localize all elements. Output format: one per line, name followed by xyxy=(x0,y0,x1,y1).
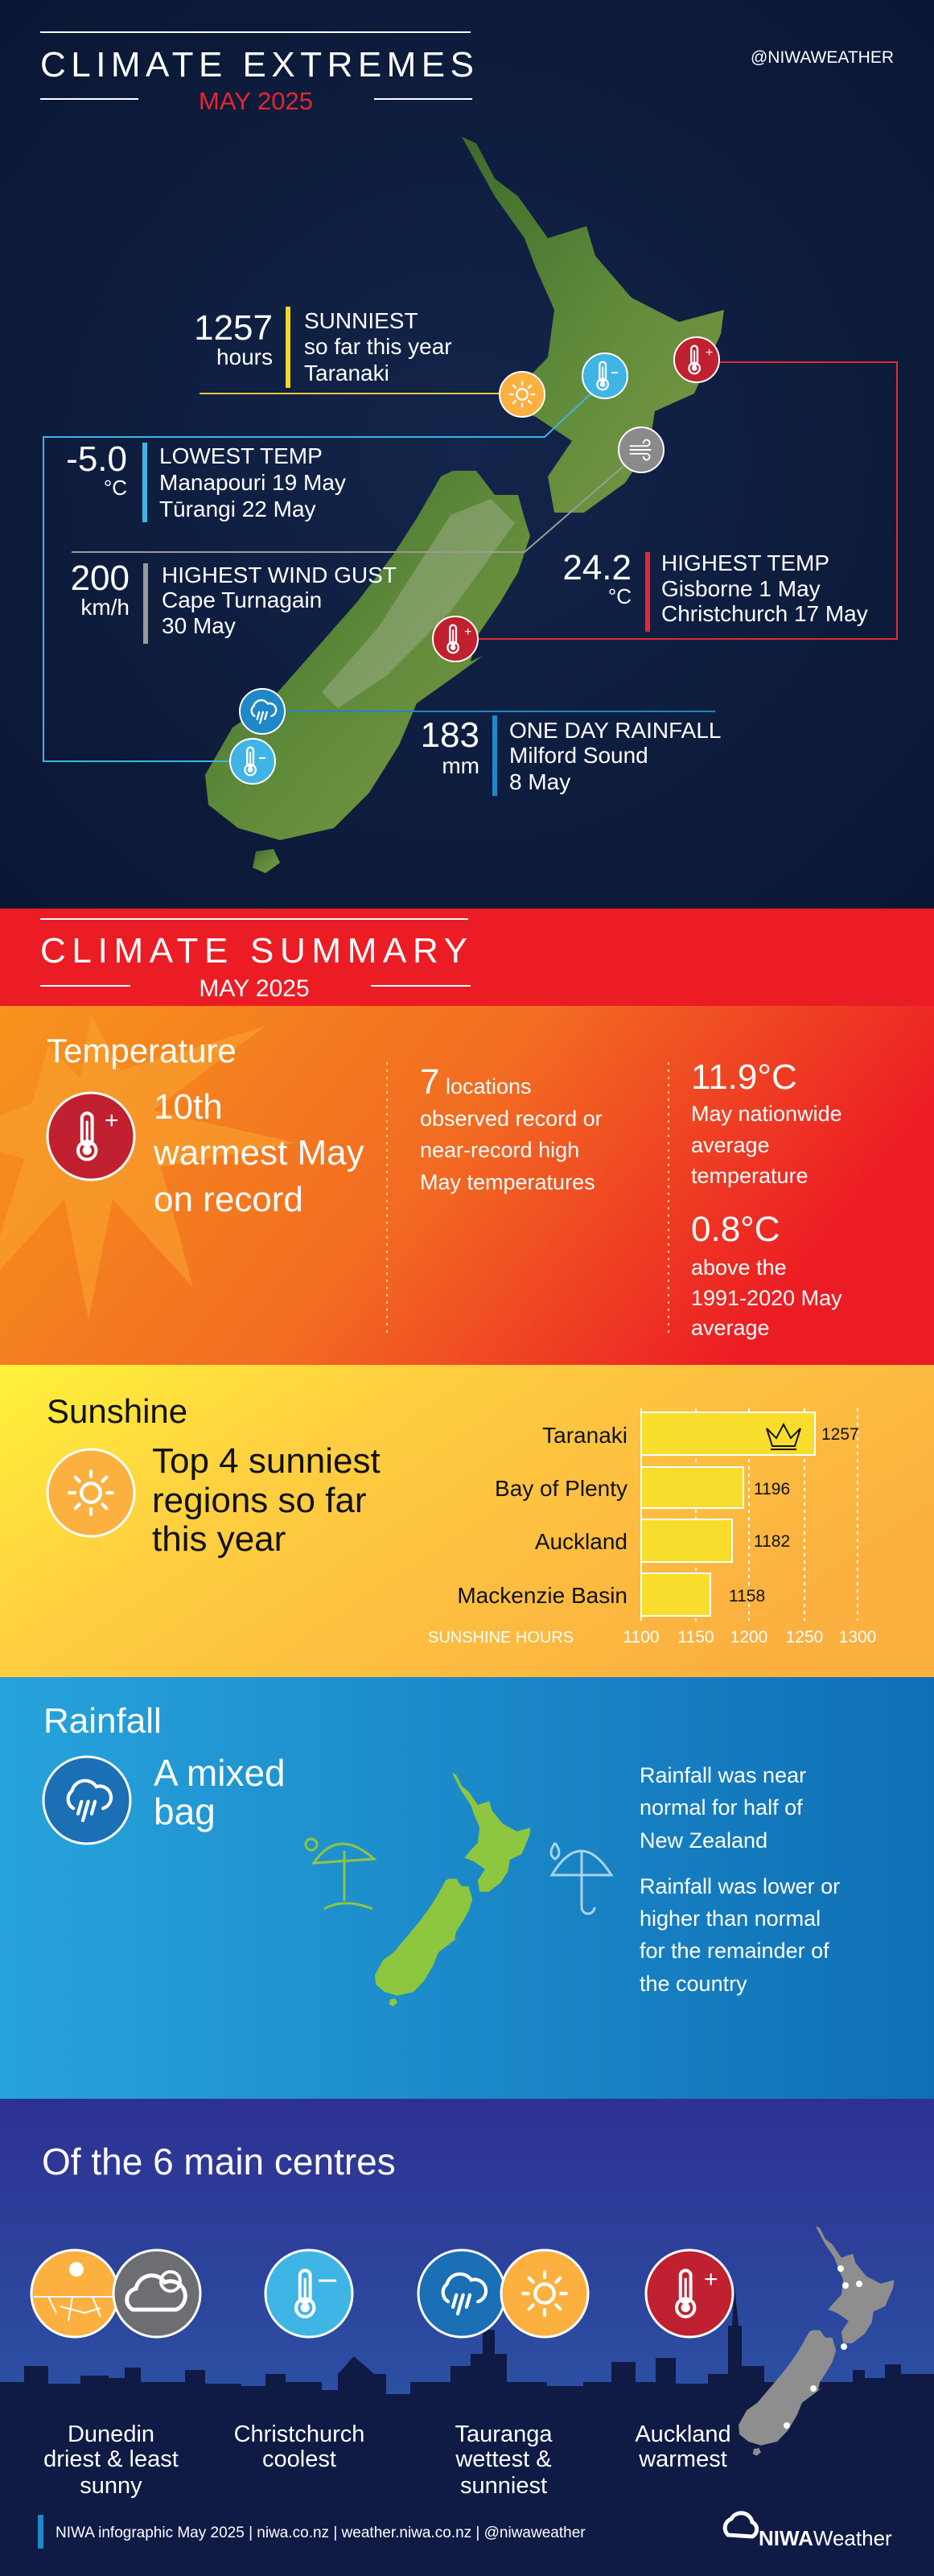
handle: @NIWAWEATHER xyxy=(751,48,894,67)
heading: temperature: Temperature xyxy=(47,1032,237,1070)
decorative sunburst xyxy=(0,1014,296,1320)
icon: cold xyxy=(265,2250,352,2337)
bar chart: sunshine hours: 1257 xyxy=(821,1425,859,1444)
callout: highest temp: 24.2 xyxy=(562,548,632,587)
text: 10th warmest: 10th xyxy=(154,1087,223,1127)
icon: warm: + xyxy=(704,2266,718,2293)
bar chart: sunshine hours: 1182 xyxy=(754,1532,790,1551)
callout: sunniest: so far this year xyxy=(304,334,452,359)
labels: centres: sunniest xyxy=(460,2473,547,2499)
map: green NZ xyxy=(375,1773,531,2006)
bar chart: sunshine hours: 1200 xyxy=(730,1628,767,1647)
text: rainfall notes xyxy=(640,1763,840,1996)
text: 10th warmest: on record xyxy=(154,1180,303,1219)
map: New Zealand satellite xyxy=(205,137,724,873)
callout: sunniest xyxy=(194,307,452,388)
heading: sunshine: Sunshine xyxy=(47,1392,187,1430)
labels: centres: Christchurch xyxy=(234,2421,364,2447)
text: top 4 sunniest: regions so far xyxy=(152,1481,367,1520)
icon: sun (Taranaki) xyxy=(500,372,545,417)
logo: NIWA Weather xyxy=(725,2513,892,2550)
callout: wind gust: 200 xyxy=(71,558,130,598)
text: national average: temperature xyxy=(691,1164,809,1188)
icon: hot thermometer (Gisborne) xyxy=(674,337,719,382)
bar chart: sunshine hours: 1300 xyxy=(839,1628,876,1647)
callout: lowest temp: -5.0 xyxy=(66,439,127,479)
text: national average: average xyxy=(691,1133,770,1157)
footer xyxy=(38,2515,586,2549)
callout: one day rainfall: 8 May xyxy=(509,769,570,794)
bar chart: sunshine hours: 1150 xyxy=(677,1628,714,1647)
text: a mixed bag: A mixed xyxy=(154,1752,286,1794)
text: national average xyxy=(691,1057,842,1340)
icon: cold thermometer (Turangi) xyxy=(582,353,627,398)
callout: lowest temp: LOWEST TEMP xyxy=(159,443,323,468)
text: 7 locations: 7 locations xyxy=(420,1062,532,1102)
callout: one day rainfall: ONE DAY RAINFALL xyxy=(509,718,721,743)
bar chart: sunshine hours: Auckland xyxy=(535,1529,627,1554)
callout: lowest temp: °C xyxy=(104,476,127,500)
map: grey NZ with centres xyxy=(739,2226,895,2456)
icon: warm xyxy=(646,2250,733,2337)
callout: sunniest: Taranaki xyxy=(304,361,389,385)
header: climate summary: MAY 2025 xyxy=(199,975,310,1002)
text: rainfall notes: for the remainder of xyxy=(640,1939,829,1963)
labels: centres: wettest & xyxy=(455,2446,552,2472)
skyline xyxy=(0,2285,934,2576)
text: top 4 sunniest: Top 4 sunniest xyxy=(152,1441,381,1481)
text: rainfall notes: Rainfall was near xyxy=(640,1763,806,1787)
icon: hot thermometer (Gisborne): + xyxy=(706,346,713,360)
bar chart: sunshine hours xyxy=(428,1408,876,1647)
icon: sun xyxy=(47,1449,134,1536)
icon: cold thermometer (Manapouri) xyxy=(230,739,275,784)
callout: lowest temp: Tūrangi 22 May xyxy=(159,497,316,521)
icon: wind xyxy=(619,427,664,472)
labels: centres: Auckland xyxy=(635,2421,731,2447)
panel: temperature xyxy=(0,1006,934,1365)
text: 7 locations xyxy=(420,1062,603,1194)
labels: centres: coolest xyxy=(262,2446,336,2472)
icon: hot thermometer (Christchurch) xyxy=(433,616,478,662)
panel: sunshine xyxy=(0,1365,934,1677)
text: rainfall notes: normal for half of xyxy=(640,1795,803,1820)
callout: one day rainfall: Milford Sound xyxy=(509,743,648,768)
title: climate extremes: MAY 2025 xyxy=(199,87,313,115)
callout: wind gust: km/h xyxy=(80,595,130,620)
text: 7 locations: May temperatures xyxy=(420,1170,595,1194)
text: 10th warmest xyxy=(153,1087,364,1219)
text: rainfall notes: New Zealand xyxy=(640,1828,767,1853)
text: rainfall notes: Rainfall was lower or xyxy=(640,1874,840,1898)
callout: one day rainfall: 183 xyxy=(421,715,479,755)
text: national average: May nationwide xyxy=(691,1102,842,1126)
callout: highest temp: Christchurch 17 May xyxy=(661,601,868,626)
icon: beach umbrella xyxy=(306,1839,374,1909)
heading: rainfall: Rainfall xyxy=(43,1701,162,1741)
bar chart: sunshine hours: 1196 xyxy=(754,1480,790,1498)
text: rainfall notes: the country xyxy=(640,1972,747,1996)
labels: centres: Dunedin xyxy=(68,2421,154,2447)
icon: cloudy xyxy=(113,2250,200,2337)
panel: main centres xyxy=(0,2099,934,2576)
labels: centres: Tauranga xyxy=(455,2421,553,2447)
connector lines xyxy=(43,362,897,761)
callout: sunniest: 1257 xyxy=(194,308,273,348)
labels: centres: sunny xyxy=(80,2473,142,2499)
callout: wind gust xyxy=(71,558,397,644)
callout: lowest temp: Manapouri 19 May xyxy=(159,470,346,495)
callout: sunniest: SUNNIEST xyxy=(304,308,418,333)
text: a mixed bag xyxy=(154,1752,286,1832)
icon: hot thermometer: + xyxy=(105,1107,119,1134)
bar chart: sunshine hours: 1100 xyxy=(623,1628,660,1647)
callout: one day rainfall xyxy=(421,715,721,796)
title: climate extremes: CLIMATE EXTREMES xyxy=(40,45,474,84)
bar chart: sunshine hours: SUNSHINE HOURS xyxy=(428,1629,574,1647)
bar chart: sunshine hours: Bay of Plenty xyxy=(495,1476,627,1501)
text: a mixed bag: bag xyxy=(154,1791,216,1832)
callout: highest temp: Gisborne 1 May xyxy=(661,576,821,601)
icon: rain xyxy=(418,2250,505,2337)
icon: crown xyxy=(767,1424,800,1449)
title: climate extremes xyxy=(40,32,474,115)
heading: main centres: Of the 6 main centres xyxy=(42,2141,396,2182)
callout: wind gust: Cape Turnagain xyxy=(162,587,322,612)
labels: centres: driest & least xyxy=(43,2446,179,2472)
callout: sunniest: hours xyxy=(216,344,273,369)
callout: one day rainfall: mm xyxy=(442,753,479,778)
text: 10th warmest: warmest May xyxy=(153,1133,364,1173)
icon: hot thermometer (Christchurch): + xyxy=(464,625,471,639)
logo: NIWA Weather: NIWAWeather xyxy=(759,2526,892,2550)
callout: highest temp: HIGHEST TEMP xyxy=(661,550,829,575)
callout: lowest temp xyxy=(66,439,346,522)
bar chart: sunshine hours: Mackenzie Basin xyxy=(457,1583,627,1608)
text: top 4 sunniest xyxy=(152,1441,381,1559)
text: national average: average xyxy=(691,1316,770,1340)
text: rainfall notes: higher than normal xyxy=(640,1906,821,1931)
icon: dry xyxy=(31,2250,118,2337)
callout: highest temp: °C xyxy=(608,584,632,608)
icon: rain umbrella xyxy=(551,1843,611,1914)
callout: wind gust: 30 May xyxy=(162,613,236,638)
bar chart: sunshine hours: 1158 xyxy=(729,1587,765,1605)
background: extremes map area xyxy=(0,0,934,909)
icon: rain (Milford Sound) xyxy=(240,689,285,734)
text: national average: 1991-2020 May xyxy=(691,1286,842,1310)
labels: centres: warmest xyxy=(638,2446,727,2472)
text: national average: 11.9°C xyxy=(691,1057,797,1097)
text: national average: above the xyxy=(691,1255,787,1280)
callout: highest temp xyxy=(562,548,868,632)
labels: centres xyxy=(43,2421,731,2499)
bar chart: sunshine hours: Taranaki xyxy=(542,1423,627,1448)
bar chart: sunshine hours: 1250 xyxy=(786,1628,823,1647)
header: climate summary xyxy=(0,909,934,1006)
text: national average: 0.8°C xyxy=(691,1210,780,1249)
icon: rain cloud xyxy=(43,1757,130,1844)
panel: rainfall xyxy=(0,1677,934,2099)
text: 7 locations: observed record or xyxy=(420,1107,603,1131)
icon: sunny xyxy=(501,2250,588,2337)
header: climate summary: CLIMATE SUMMARY xyxy=(40,931,467,971)
text: 7 locations: near-record high xyxy=(420,1138,579,1162)
callout: wind gust: HIGHEST WIND GUST xyxy=(162,563,397,587)
footer: NIWA infographic May 2025 | niwa.co.nz | weather.niwa.co.nz | @niwaweather xyxy=(56,2524,586,2541)
text: top 4 sunniest: this year xyxy=(152,1519,286,1559)
icon: hot thermometer xyxy=(47,1093,134,1180)
